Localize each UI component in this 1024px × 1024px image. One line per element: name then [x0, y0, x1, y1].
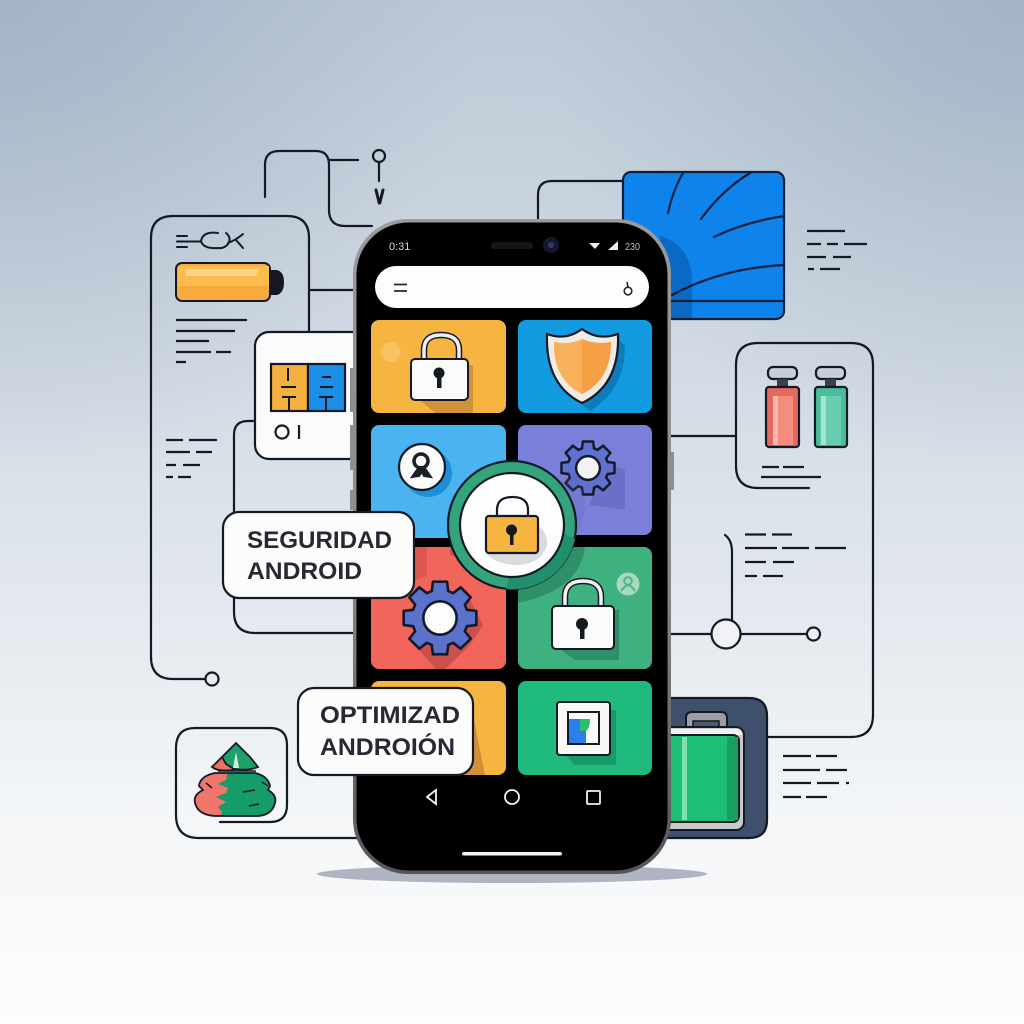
label: optimización android: OPTIMIZAD — [320, 702, 460, 729]
icon: gear — [561, 441, 615, 495]
label: seguridad android — [223, 512, 414, 598]
tile: purple gear — [518, 425, 652, 535]
icon: status glyphs — [276, 425, 299, 439]
icon: chip schematic — [271, 364, 345, 411]
tile: orange partial — [371, 681, 506, 775]
icon: red bottle — [766, 367, 799, 447]
nav bar — [427, 790, 600, 856]
text lines: bottles — [761, 467, 821, 477]
label: seguridad android: SEGURIDAD — [247, 527, 392, 554]
status bar: 0:31 — [389, 241, 410, 253]
panel: green battery card — [660, 698, 767, 838]
icon: padlock — [486, 497, 538, 553]
status bar — [389, 237, 640, 253]
label: optimización android: ANDROIÓN — [320, 733, 455, 761]
search bar — [375, 266, 649, 308]
tile: blue shield — [518, 320, 652, 413]
node connector — [668, 535, 820, 648]
icon: user badge — [399, 444, 445, 490]
phone ground shadow — [317, 865, 707, 883]
icon: badge — [616, 572, 640, 596]
tile: red gear — [371, 547, 506, 669]
panel: battery card outline — [151, 216, 356, 686]
center lock badge — [448, 461, 585, 590]
text lines: blue display — [807, 231, 867, 269]
text lines: green battery card — [783, 756, 849, 797]
phone — [350, 219, 674, 874]
phone side buttons — [350, 368, 674, 510]
tile: orange lock — [371, 320, 506, 413]
icon: gear — [404, 582, 476, 654]
label: seguridad android: ANDROID — [247, 558, 362, 585]
label: optimización android — [298, 688, 485, 775]
panel: pile icon card — [176, 728, 358, 838]
icon: padlock — [552, 581, 614, 649]
icon: orange battery — [176, 263, 284, 301]
top connector lines — [265, 150, 624, 226]
icon: layered mound — [195, 743, 280, 818]
text lines: battery panel — [166, 320, 247, 477]
panel: bottles — [668, 343, 873, 737]
panel: blue display — [623, 172, 784, 320]
icon: shield — [547, 329, 618, 403]
tile: green frame — [518, 681, 652, 775]
status bar: 230 — [625, 242, 640, 253]
tile: green lock — [518, 547, 652, 669]
panel: chip card — [255, 332, 375, 459]
icon: picture frame — [557, 702, 610, 755]
icon: green battery — [660, 712, 744, 830]
text lines: node connector — [745, 534, 846, 576]
icon: green bottle — [815, 367, 847, 447]
icon: battery heading glyph — [177, 233, 243, 248]
icon: padlock — [411, 335, 468, 400]
tile: blue user — [371, 425, 506, 538]
